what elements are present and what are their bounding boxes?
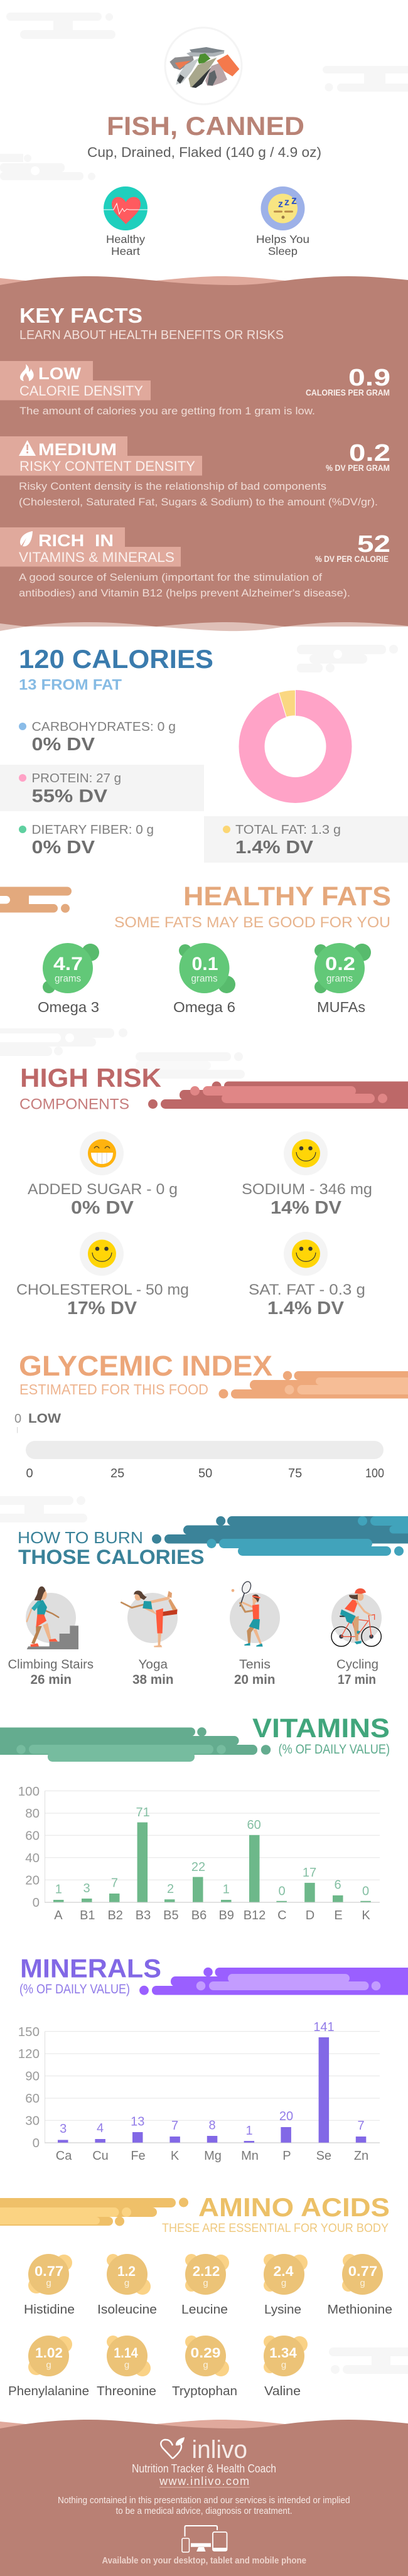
amino: tryptophan: 0.29 <box>191 2345 221 2361</box>
amino: tryptophan <box>172 2336 237 2398</box>
panel: footer <box>0 2420 408 2576</box>
amino: phenylalanine: 1.02 <box>35 2345 63 2361</box>
logo: inlivo: inlivo <box>192 2436 247 2464</box>
badge: mufas <box>314 943 371 1015</box>
risk: saturated fat <box>249 1232 365 1318</box>
heading: high risk: HIGH RISK <box>20 1063 161 1092</box>
disclaimer <box>58 2495 350 2516</box>
bar chart: vitamins: 40 <box>25 1851 40 1865</box>
donut chart <box>252 690 339 790</box>
fact: low calorie density: CALORIE DENSITY <box>19 383 143 399</box>
gauge bar <box>26 1441 384 1459</box>
amino: tryptophan: g <box>203 2360 208 2371</box>
bar chart: minerals: Zn <box>354 2149 368 2163</box>
bar chart: vitamins: B1 <box>80 1909 95 1922</box>
amino: methionine: Methionine <box>328 2303 392 2317</box>
risk: added sugar: ADDED SUGAR - 0 g <box>28 1181 178 1198</box>
amino: valine: 1.34 <box>269 2345 298 2361</box>
badge: omega 3: 4.7 <box>53 954 83 974</box>
nutrient: carbohydrates: CARBOHYDRATES: 0 g <box>31 720 176 734</box>
icon: warning triangle <box>19 440 36 456</box>
icon: devices <box>182 2526 227 2552</box>
bar chart: vitamins: E <box>334 1909 343 1922</box>
fact: rich in vitamins and minerals: antibodies) and Vitamin B12 (helps prevent Alzheimer's disease). <box>19 587 350 599</box>
bar chart: minerals: 90 <box>25 2069 40 2083</box>
label: healthy heart: Heart <box>111 245 140 257</box>
bar chart: vitamins: 1 <box>223 1883 230 1897</box>
risk: cholesterol <box>16 1232 189 1318</box>
amino: isoleucine <box>97 2254 157 2317</box>
fact: low calorie density: CALORIES PER GRAM <box>306 387 390 397</box>
amino: phenylalanine <box>8 2336 89 2398</box>
panel: healthy fats <box>0 881 391 1015</box>
panel: key facts <box>0 276 408 631</box>
fact: medium risky content density <box>0 436 390 508</box>
fact: rich in vitamins and minerals: RICH IN <box>38 531 114 550</box>
fact: medium risky content density: % DV PER GRAM <box>326 463 390 473</box>
heading: minerals: MINERALS <box>20 1954 161 1983</box>
risk: added sugar <box>28 1131 178 1218</box>
bar chart: minerals: 30 <box>25 2113 40 2128</box>
subheading: healthy fats: SOME FATS MAY BE GOOD FOR YOU <box>114 914 390 931</box>
bar chart: minerals: K <box>171 2149 180 2163</box>
activity: tennis <box>230 1580 280 1687</box>
heading: key facts: KEY FACTS <box>19 304 142 327</box>
amino: histidine <box>24 2254 75 2317</box>
title: FISH, CANNED <box>107 111 304 141</box>
badge: mufas: grams <box>326 973 353 984</box>
label: healthy heart <box>106 233 145 257</box>
panel: how to burn those calories <box>0 1496 408 1687</box>
bar chart: vitamins: 100 <box>18 1784 40 1799</box>
icon: sleep: z <box>284 197 289 208</box>
badge: mufas: MUFAs <box>317 999 365 1015</box>
logo: inlivo <box>161 2436 247 2464</box>
amino: lysine: 2.4 <box>274 2263 294 2279</box>
amino: leucine: Leucine <box>181 2303 228 2317</box>
amino: methionine: g <box>360 2278 365 2288</box>
badge: mufas: 0.2 <box>325 954 355 974</box>
fact: rich in vitamins and minerals: % DV PER CALORIE <box>315 554 389 564</box>
bar chart: vitamins: 0 <box>33 1895 40 1910</box>
nutrient: total fat: TOTAL FAT: 1.3 g <box>235 823 341 837</box>
bar chart: minerals: 141 <box>313 2020 335 2034</box>
amino: phenylalanine: Phenylalanine <box>8 2385 89 2398</box>
nutrient: carbohydrates: 0% DV <box>31 735 95 755</box>
bar chart: minerals <box>18 2020 380 2163</box>
activity: climbing stairs: 26 min <box>30 1673 72 1687</box>
food image: canned fish <box>165 28 242 104</box>
bar chart: minerals: 20 <box>279 2110 293 2123</box>
nutrient: dietary fiber: DIETARY FIBER: 0 g <box>31 823 154 837</box>
activity: yoga <box>121 1591 178 1687</box>
activity: cycling: Cycling <box>336 1657 378 1671</box>
nutrient: dietary fiber <box>19 823 154 858</box>
badge: omega 6: 0.1 <box>192 954 218 974</box>
risk: added sugar: 0% DV <box>71 1198 134 1218</box>
subheading: amino acids: THESE ARE ESSENTIAL FOR YOUR BODY <box>162 2221 389 2235</box>
label: helps you sleep: Sleep <box>268 245 298 257</box>
bar chart: vitamins: B2 <box>107 1909 123 1922</box>
risk: sodium <box>242 1131 372 1218</box>
bar chart: minerals: 1 <box>245 2124 253 2138</box>
nutrient: dietary fiber: 0% DV <box>31 838 95 858</box>
heading: those calories: THOSE CALORIES <box>18 1546 205 1568</box>
marker: value low <box>14 1411 61 1433</box>
bar chart: minerals: 0 <box>33 2136 40 2150</box>
bar chart: minerals: 3 <box>60 2122 67 2136</box>
bar chart: vitamins: 2 <box>167 1882 174 1896</box>
bar chart: vitamins: 0 <box>362 1885 369 1899</box>
heading: how to burn: HOW TO BURN <box>18 1528 143 1547</box>
activity: climbing stairs: Climbing Stairs <box>8 1657 94 1671</box>
amino: methionine <box>328 2254 392 2317</box>
badge: omega 6 <box>173 943 235 1015</box>
amino: lysine: Lysine <box>264 2303 301 2317</box>
decorative: blob <box>0 887 72 913</box>
bar chart: minerals: 7 <box>171 2119 178 2133</box>
bar chart: minerals: 7 <box>357 2119 365 2133</box>
icon: leaf <box>20 531 33 546</box>
bar chart: vitamins: 80 <box>25 1806 40 1821</box>
decorative: blob <box>218 1371 408 1399</box>
bar chart: minerals: 4 <box>97 2121 104 2135</box>
activity: tennis: 20 min <box>234 1673 275 1687</box>
amino: valine: Valine <box>264 2385 301 2398</box>
bar chart: vitamins: 60 <box>247 1818 261 1832</box>
serving size: Cup, Drained, Flaked (140 g / 4.9 oz) <box>87 144 321 160</box>
decorative: blob <box>139 1968 408 1995</box>
bar chart: minerals: Mg <box>204 2149 222 2163</box>
activity: cycling: 17 min <box>338 1673 376 1687</box>
nutrient: total fat: 1.4% DV <box>235 838 314 858</box>
bar chart: minerals: Mn <box>241 2149 259 2163</box>
gauge scale <box>26 1467 384 1480</box>
gauge scale: 25 <box>110 1467 124 1480</box>
bar chart: vitamins: 1 <box>55 1883 62 1897</box>
fact: medium risky content density: RISKY CONTENT DENSITY <box>19 458 195 474</box>
bar chart: vitamins: B6 <box>191 1909 207 1922</box>
bar chart: minerals: Cu <box>92 2149 109 2163</box>
amino: lysine: g <box>281 2278 286 2288</box>
nutrient: protein <box>0 765 204 811</box>
gauge scale: 0 <box>26 1467 33 1480</box>
amino: valine: g <box>281 2360 286 2371</box>
nutrient: total fat <box>204 816 408 863</box>
amino: isoleucine: 1.2 <box>117 2263 136 2279</box>
panel: calories <box>0 644 408 863</box>
bar chart: vitamins: A <box>54 1909 63 1922</box>
nutrient: carbohydrates <box>19 720 176 755</box>
decorative: blob <box>0 1727 271 1762</box>
fact: medium risky content density: Risky Content density is the relationship of bad components <box>19 480 326 492</box>
marker: value low: LOW <box>28 1411 61 1426</box>
icon: flame <box>20 364 34 381</box>
bar chart: vitamins: 22 <box>191 1860 205 1874</box>
bar chart: vitamins: D <box>306 1909 314 1922</box>
fact: medium risky content density: MEDIUM <box>38 440 117 459</box>
activity: yoga: Yoga <box>138 1657 168 1671</box>
badge: omega 3: grams <box>55 973 81 984</box>
marker: value low: 0 <box>14 1412 21 1426</box>
amino: isoleucine: Isoleucine <box>97 2303 157 2317</box>
fact: medium risky content density: (Cholesterol, Saturated Fat, Sugars & Sodium) to the amount (%DV/gr). <box>19 496 378 508</box>
bar chart: vitamins: 60 <box>25 1828 40 1843</box>
bar chart: minerals: 120 <box>18 2047 40 2061</box>
amino: histidine: g <box>46 2278 51 2288</box>
icon: sleep <box>261 186 305 230</box>
bar chart: minerals: Fe <box>131 2149 146 2163</box>
bar chart: minerals: P <box>282 2149 291 2163</box>
amino: threonine: Threonine <box>97 2385 156 2398</box>
heading: glycemic index: GLYCEMIC INDEX <box>19 1350 272 1382</box>
bar chart: minerals: Se <box>316 2149 331 2163</box>
bar chart: vitamins: 7 <box>111 1877 118 1890</box>
fact: low calorie density: 0.9 <box>348 365 390 391</box>
badge: omega 3: Omega 3 <box>38 999 99 1015</box>
panel: high risk components <box>0 1028 408 1318</box>
bar chart: minerals: Ca <box>56 2149 72 2163</box>
subheading: components: COMPONENTS <box>19 1096 129 1113</box>
panel: glycemic index <box>14 1350 408 1480</box>
bar chart: minerals: 13 <box>131 2115 144 2129</box>
subheading: glycemic index: ESTIMATED FOR THIS FOOD <box>19 1381 208 1398</box>
nutrient: protein: 55% DV <box>31 786 108 806</box>
panel: minerals <box>18 1954 408 2163</box>
website link: www.inlivo.com <box>159 2475 249 2487</box>
amino: valine <box>264 2336 308 2398</box>
heading: healthy fats: HEALTHY FATS <box>183 881 391 912</box>
bar chart: vitamins: 17 <box>303 1866 316 1880</box>
bar chart: vitamins: B5 <box>163 1909 179 1922</box>
gauge scale: 50 <box>198 1467 212 1480</box>
subheading: from fat: 13 FROM FAT <box>19 677 122 693</box>
activity: yoga: 38 min <box>132 1673 173 1687</box>
bar chart: vitamins: 71 <box>136 1806 150 1819</box>
bar chart: vitamins: C <box>277 1909 287 1922</box>
bar chart: minerals: 8 <box>208 2119 216 2133</box>
risk: saturated fat: SAT. FAT - 0.3 g <box>249 1281 365 1298</box>
disclaimer: to be a medical advice, diagnosis or treatment. <box>115 2506 293 2516</box>
amino: lysine <box>264 2254 308 2317</box>
availability note: Available on your desktop, tablet and mobile phone <box>102 2555 306 2566</box>
amino: tryptophan: Tryptophan <box>172 2385 237 2398</box>
amino: threonine <box>97 2336 156 2398</box>
subheading: key facts: LEARN ABOUT HEALTH BENEFITS OR RISKS <box>19 328 284 342</box>
bar chart: vitamins: B12 <box>244 1909 266 1922</box>
label: helps you sleep <box>256 233 309 257</box>
amino: isoleucine: g <box>124 2278 129 2288</box>
icon: sleep: z <box>278 199 283 210</box>
amino: threonine: 1.14 <box>114 2345 138 2361</box>
decorative: blob <box>148 1081 408 1109</box>
gauge scale: 75 <box>288 1467 302 1480</box>
subheading: percent daily value: (% OF DAILY VALUE) <box>19 1982 130 1997</box>
amino: histidine: Histidine <box>24 2303 75 2317</box>
nutrient: protein: PROTEIN: 27 g <box>31 772 121 785</box>
heading: vitamins: VITAMINS <box>252 1713 390 1743</box>
bar chart: minerals: 150 <box>18 2025 40 2039</box>
badge: omega 6: Omega 6 <box>173 999 235 1015</box>
risk: sodium: SODIUM - 346 mg <box>242 1181 372 1198</box>
amino: threonine: g <box>124 2360 129 2371</box>
decorative: blob <box>0 2197 188 2226</box>
fact: medium risky content density: 0.2 <box>349 440 390 466</box>
bar chart: vitamins: B9 <box>218 1909 234 1922</box>
fact: rich in vitamins and minerals <box>0 527 390 599</box>
risk: sodium: 14% DV <box>271 1198 342 1218</box>
activity: tennis: Tenis <box>239 1657 271 1671</box>
gauge scale: 100 <box>365 1467 384 1480</box>
heading: amino acids: AMINO ACIDS <box>198 2192 390 2222</box>
decorative: blob <box>152 1516 408 1556</box>
disclaimer: Nothing contained in this presentation and our services is intended or implied <box>58 2495 350 2506</box>
bar chart: vitamins: 6 <box>334 1878 341 1892</box>
bar chart: minerals: 60 <box>25 2091 40 2106</box>
badge: omega 3 <box>38 943 99 1015</box>
bar chart: vitamins: B3 <box>136 1909 151 1922</box>
activity: cycling <box>331 1588 382 1687</box>
panel: header <box>0 13 408 257</box>
badge: omega 6: grams <box>191 973 217 984</box>
amino: histidine: 0.77 <box>35 2263 63 2279</box>
risk: saturated fat: 1.4% DV <box>267 1298 345 1318</box>
tagline: Nutrition Tracker & Health Coach <box>132 2462 276 2475</box>
fact: rich in vitamins and minerals: A good source of Selenium (important for the stimulation of <box>19 571 322 583</box>
label: healthy heart: Healthy <box>106 233 145 245</box>
fact: rich in vitamins and minerals: VITAMINS & MINERALS <box>19 549 174 565</box>
fact: low calorie density: LOW <box>38 364 82 383</box>
heading: 120 calories: 120 CALORIES <box>19 644 213 674</box>
fact: low calorie density: The amount of calories you are getting from 1 gram is low. <box>19 405 315 417</box>
amino: leucine: 2.12 <box>193 2263 220 2279</box>
amino: leucine <box>181 2254 229 2317</box>
bar chart: vitamins: 20 <box>25 1873 40 1887</box>
amino: methionine: 0.77 <box>348 2263 377 2279</box>
bar chart: vitamins <box>18 1784 380 1922</box>
activity: climbing stairs <box>8 1587 94 1687</box>
bar chart: vitamins: 3 <box>83 1882 90 1895</box>
bar chart: vitamins: 0 <box>278 1885 286 1899</box>
amino: leucine: g <box>203 2278 208 2288</box>
icon: sleep: z <box>291 194 297 207</box>
risk: cholesterol: 17% DV <box>67 1298 137 1318</box>
icon: healthy heart <box>104 186 148 230</box>
fact: rich in vitamins and minerals: 52 <box>357 531 390 558</box>
amino: phenylalanine: g <box>46 2360 51 2371</box>
fact: low calorie density <box>0 361 390 417</box>
label: helps you sleep: Helps You <box>256 233 309 245</box>
risk: cholesterol: CHOLESTEROL - 50 mg <box>16 1281 189 1298</box>
bar chart: vitamins: K <box>362 1909 370 1922</box>
panel: vitamins <box>0 1713 390 1922</box>
subheading: percent daily value: (% OF DAILY VALUE) <box>279 1742 390 1757</box>
panel: amino acids <box>0 2192 408 2398</box>
